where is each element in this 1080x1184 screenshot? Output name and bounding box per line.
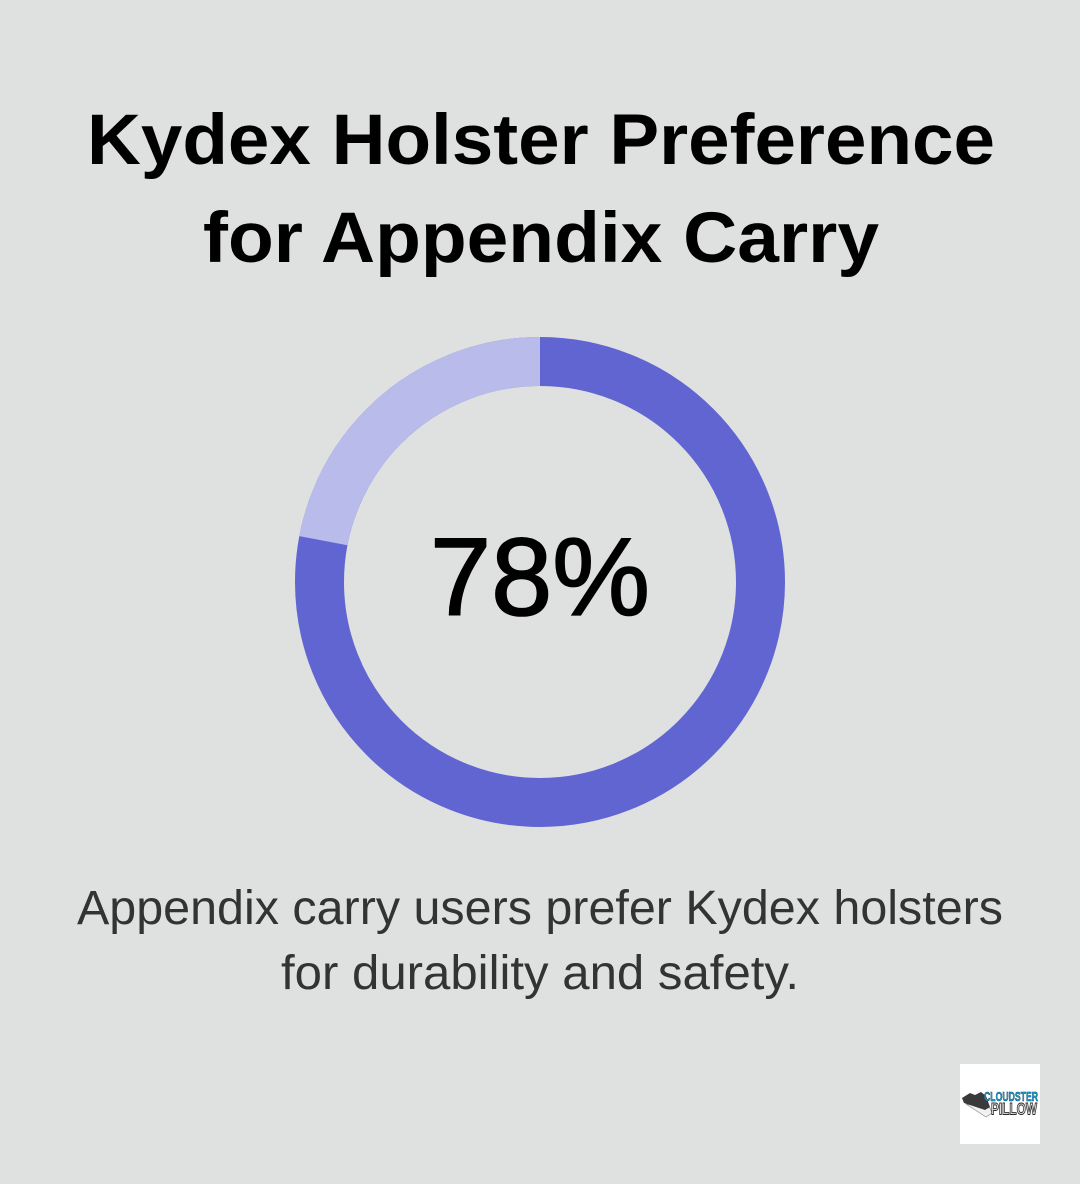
logo wordmark: CLOUDSTER — [984, 1089, 1038, 1104]
description: Appendix carry users prefer Kydex holsters — [77, 882, 1003, 935]
logo: Cloudster Pillow — [960, 1064, 1040, 1144]
donut chart: 78% — [320, 361, 760, 802]
logo wordmark: PILLOW — [991, 1100, 1037, 1118]
description: for durability and safety. — [281, 947, 799, 1000]
center value: 78% — [430, 516, 650, 639]
description — [77, 882, 1003, 1000]
title: Kydex Holster Preference — [87, 101, 995, 180]
icon: pillow — [962, 1092, 992, 1117]
title: for Appendix Carry — [203, 199, 880, 278]
title — [87, 101, 995, 278]
logo wordmark — [984, 1089, 1038, 1118]
